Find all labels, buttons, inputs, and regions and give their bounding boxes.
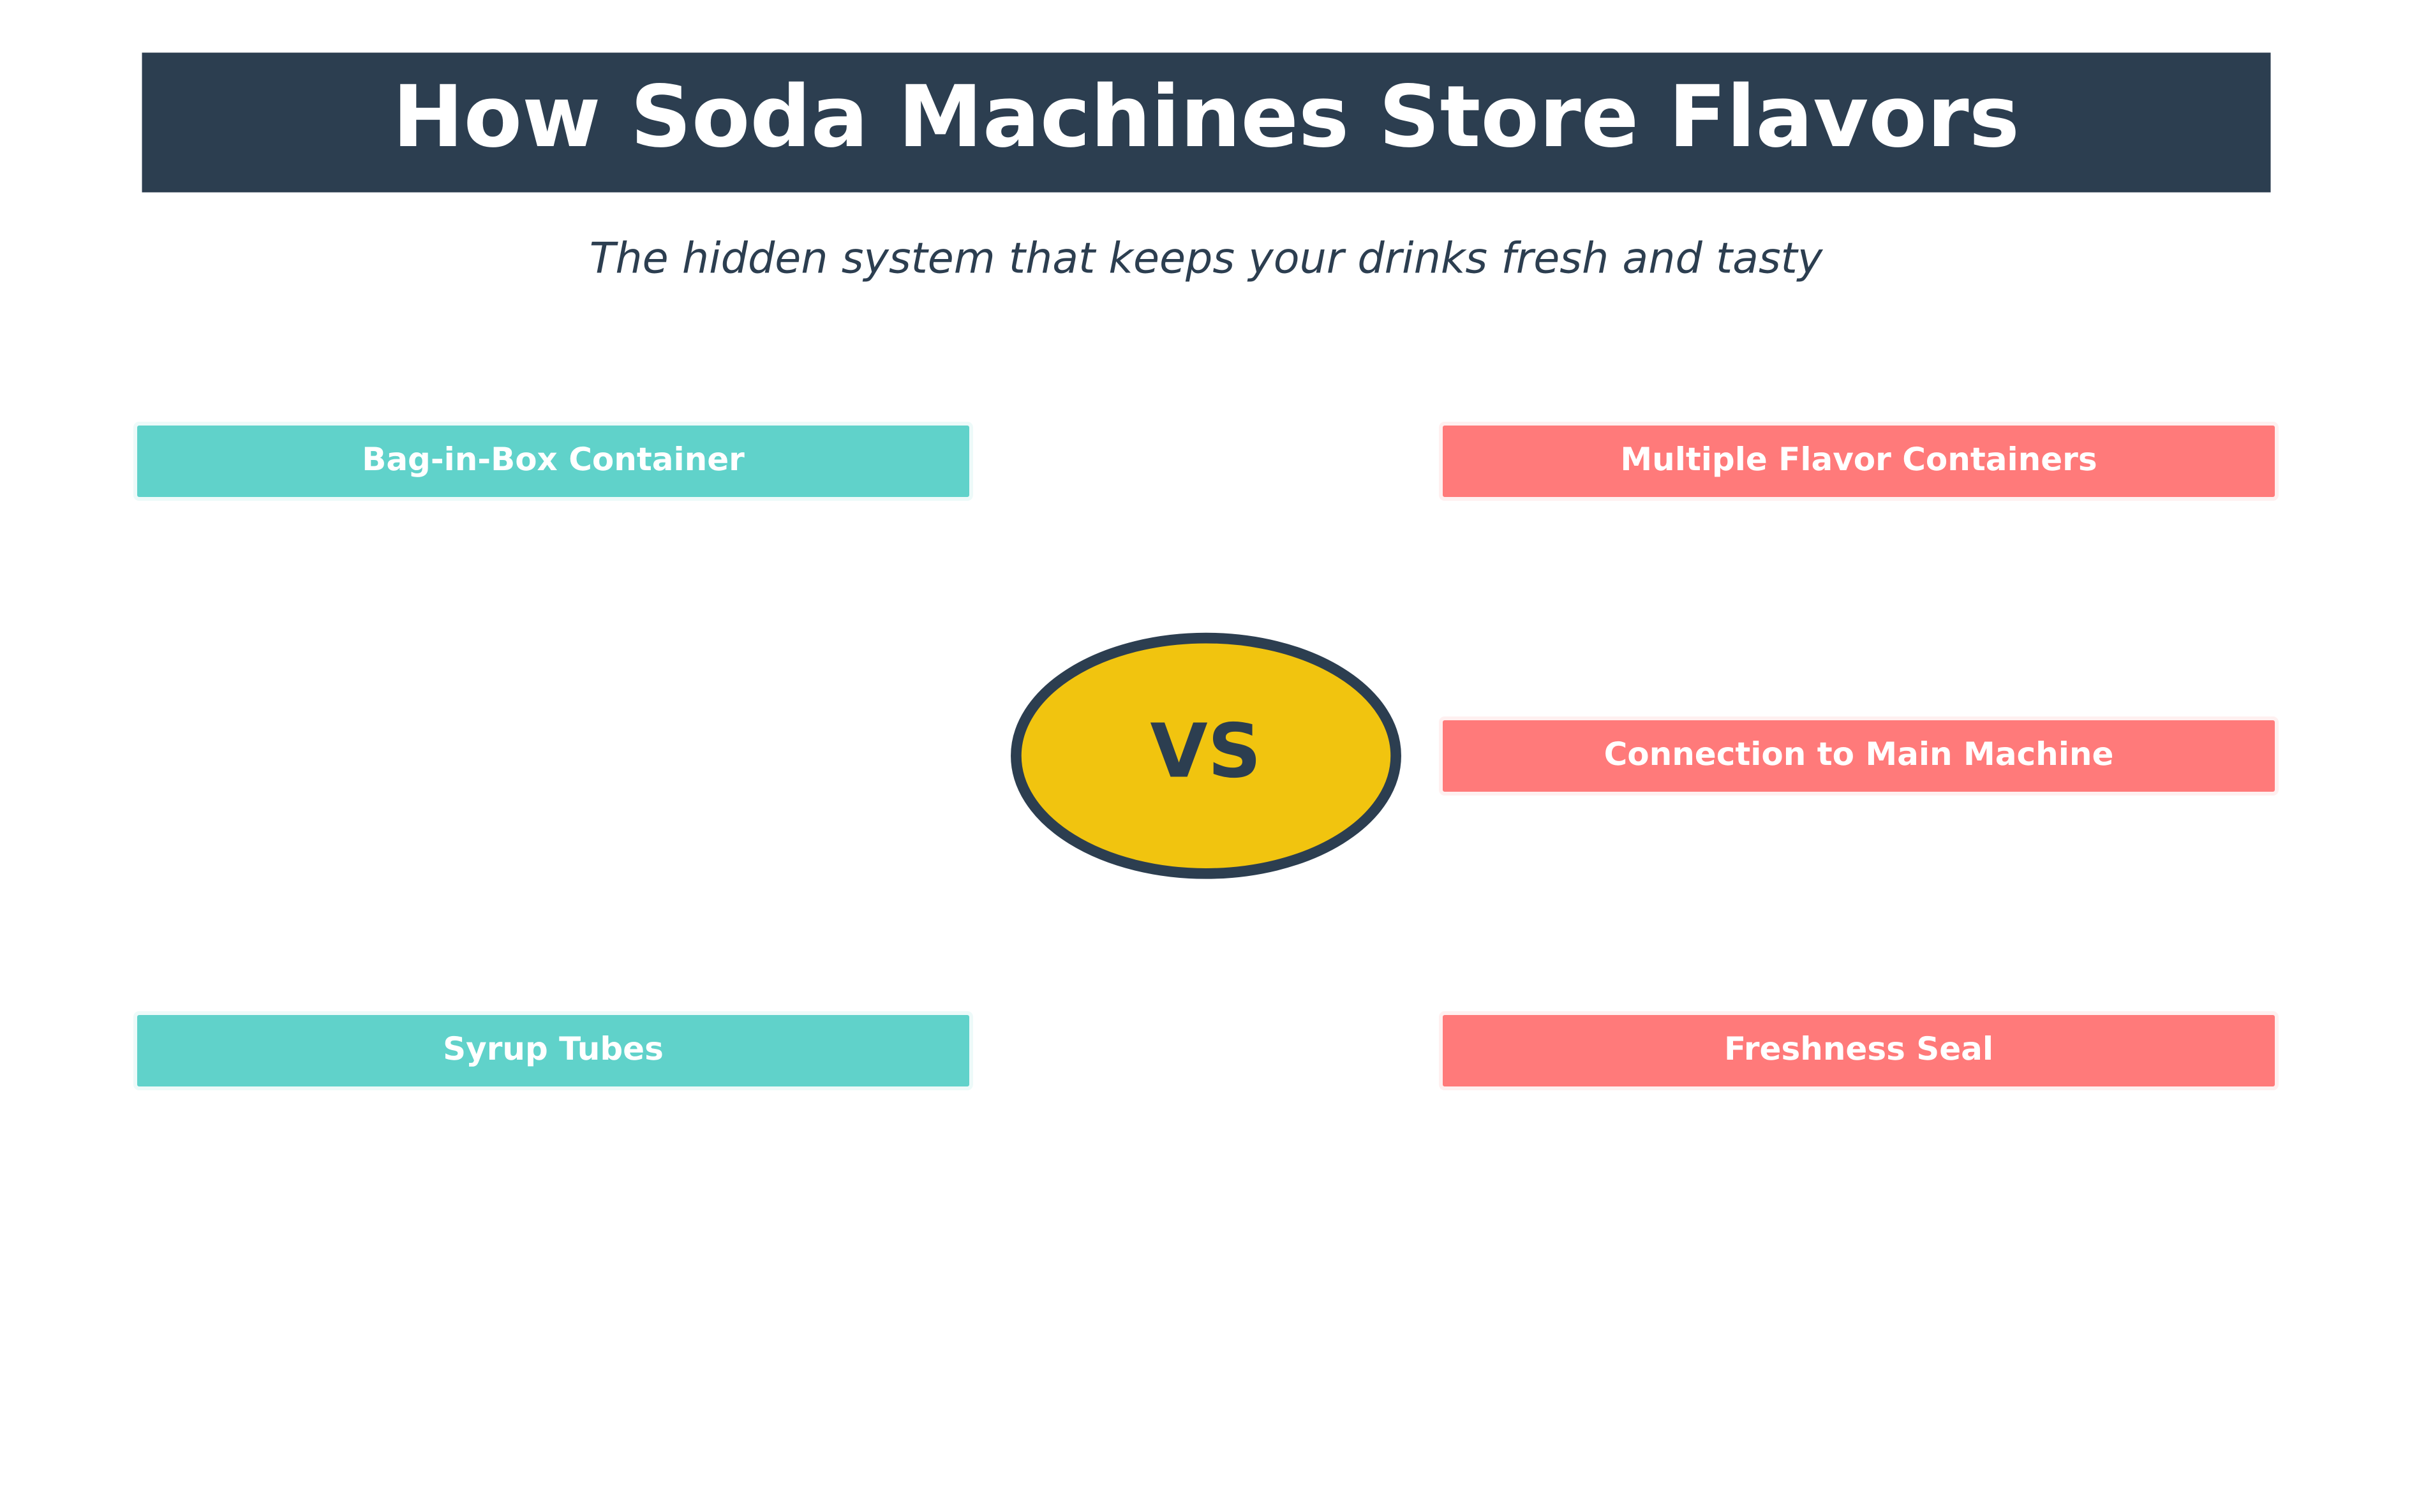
title banner: How Soda Machines Store Flavors [392,68,2020,167]
panel: Syrup Tubes: Syrup Tubes [443,1030,664,1067]
panel: Connection to Main Machine: Connection to Main Machine [1604,736,2113,773]
panel: Syrup Tubes [135,1013,971,1088]
panel: Bag-in-Box Container: Bag-in-Box Container [362,441,745,478]
panel: Multiple Flavor Containers [1441,424,2277,499]
panel: Freshness Seal [1441,1013,2277,1088]
subtitle: The hidden system that keeps your drinks fresh and tasty [590,233,1824,283]
title banner [142,52,2270,193]
VS badge: VS [1150,708,1262,795]
panel: Multiple Flavor Containers: Multiple Flavor Containers [1620,441,2097,478]
VS badge [1016,638,1396,873]
panel: Bag-in-Box Container [135,424,971,499]
panel: Connection to Main Machine [1441,718,2277,794]
panel: Freshness Seal: Freshness Seal [1724,1030,1993,1067]
